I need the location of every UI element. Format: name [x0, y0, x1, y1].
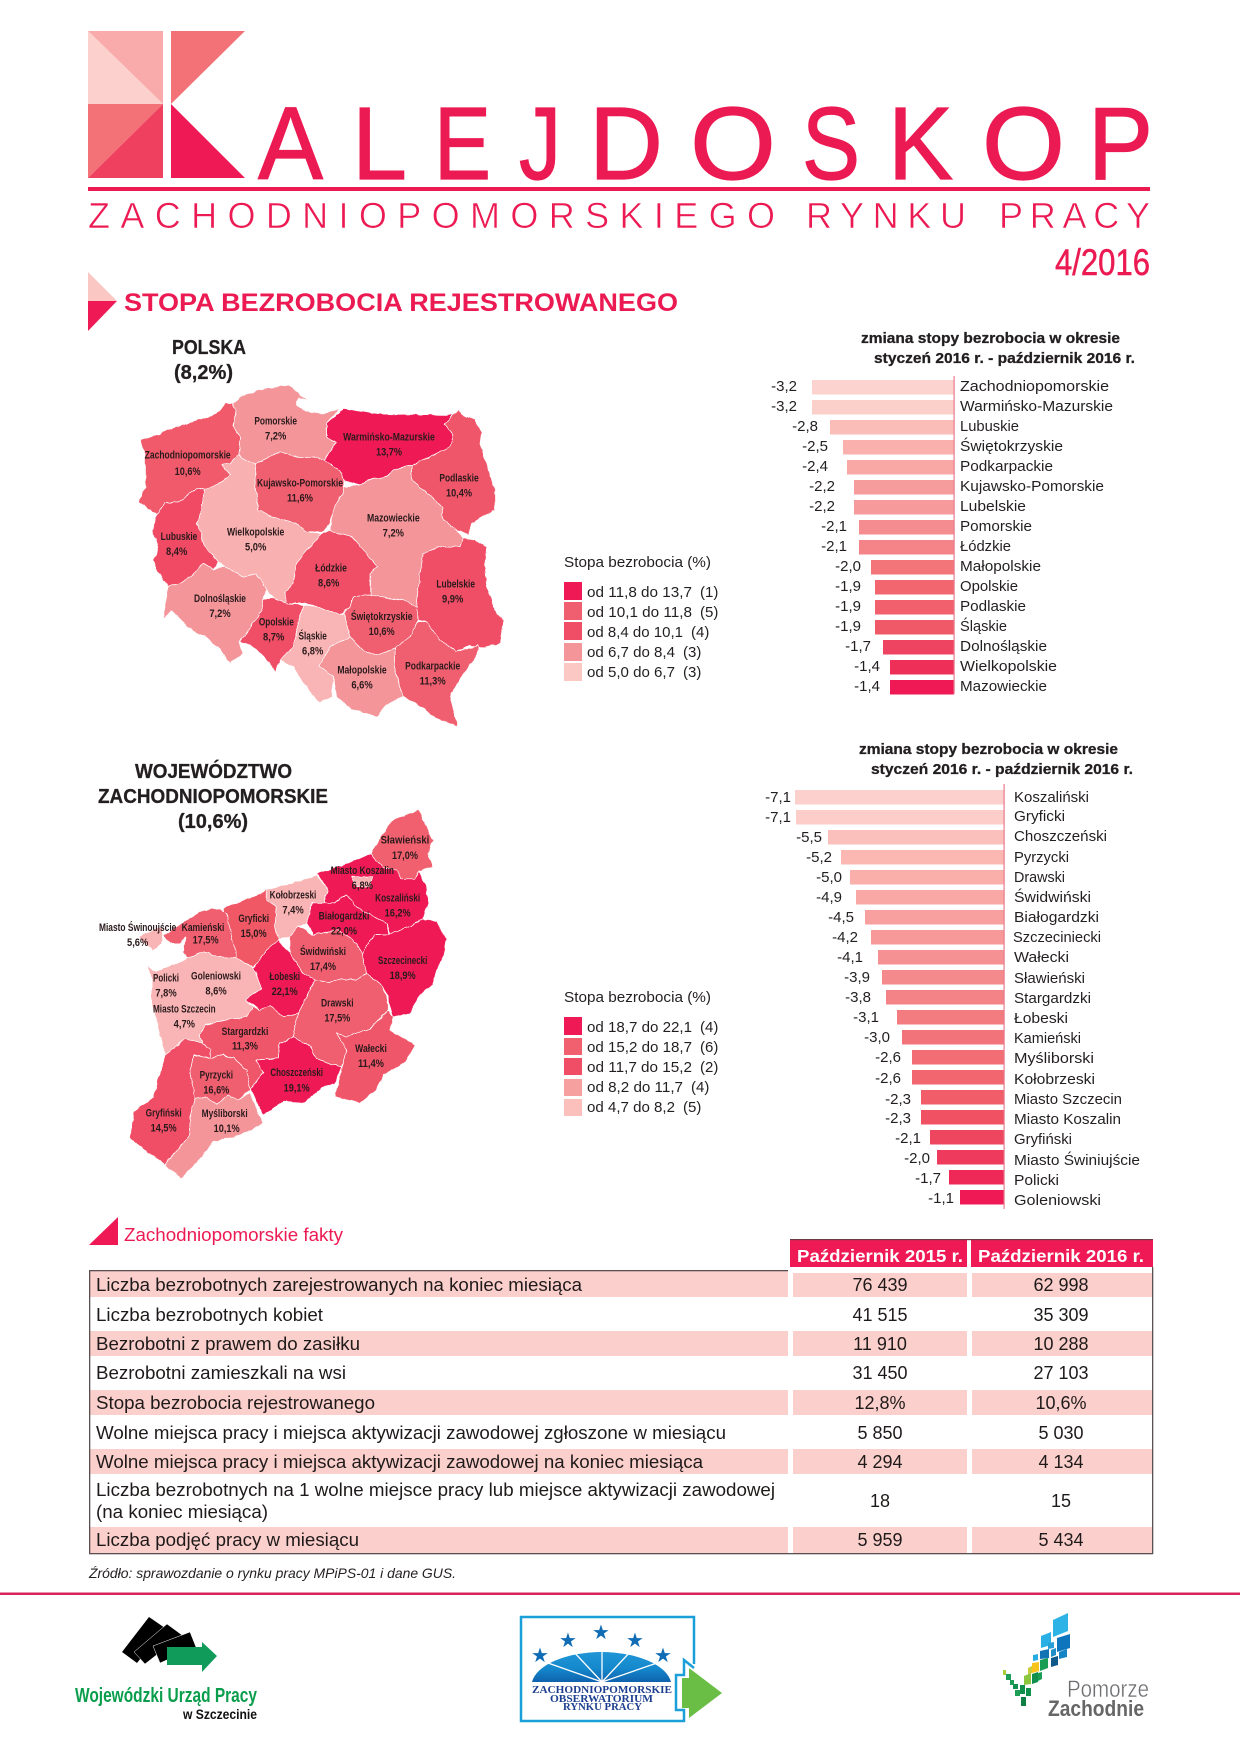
chart: change in unemployment rate by county: -4,1 — [837, 949, 863, 966]
table: West Pomeranian labour market facts: 15 — [1051, 1491, 1071, 1511]
chart: change in unemployment rate by county: Gryfiński — [1014, 1131, 1072, 1148]
map: West Pomeranian counties: Stargardzki — [222, 1026, 268, 1038]
table borders — [89, 1267, 1153, 1554]
map: Poland voivodeships: Podlaskie — [439, 473, 479, 485]
chart: change in unemployment rate by county — [765, 741, 1140, 1209]
map: West Pomeranian counties: 17,0% — [392, 850, 418, 862]
section heading: West Pomeranian facts — [89, 1217, 343, 1245]
table: West Pomeranian labour market facts: (na koniec miesiąca) — [96, 1502, 268, 1522]
map: West Pomeranian counties: 4,7% — [174, 1019, 195, 1031]
title: ALEJDOSKOP: P — [1088, 86, 1153, 201]
map: West Pomeranian counties: Pyrzycki — [200, 1070, 233, 1082]
table: West Pomeranian labour market facts: 10,6% — [1035, 1393, 1087, 1413]
chart: change in unemployment rate by voivodeship: Warmińsko-Mazurskie — [960, 398, 1113, 415]
chart: change in unemployment rate by voivodeship: Pomorskie — [960, 518, 1032, 535]
map: West Pomeranian counties: Miasto Koszalin — [331, 865, 394, 877]
map: West Pomeranian counties: Szczecinecki — [378, 955, 427, 967]
chart: change in unemployment rate by voivodeship: -2,5 — [802, 438, 828, 455]
legend: Poland unemployment rate: (3) — [683, 644, 701, 661]
chart heading: zmiana stopy bezrobocia w okresie — [859, 741, 1118, 758]
chart: change in unemployment rate by voivodeship: Śląskie — [960, 617, 1007, 635]
map: Poland voivodeships: Mazowieckie — [367, 513, 420, 525]
map: West Pomeranian counties: Świdwiński — [300, 945, 346, 958]
section heading: West Pomeranian facts: Zachodniopomorskie fakty — [124, 1225, 343, 1245]
table: West Pomeranian labour market facts: Wolne miejsca pracy i miejsca aktywizacji zawodowej zgłoszone w miesiącu — [96, 1423, 726, 1443]
map: West Pomeranian counties: Goleniowski — [191, 970, 241, 982]
chart: change in unemployment rate by county: -3,0 — [864, 1029, 890, 1046]
legend: Poland unemployment rate: (4) — [691, 624, 709, 641]
map: West Pomeranian counties: 16,6% — [203, 1085, 230, 1097]
table: West Pomeranian labour market facts: 5 850 — [857, 1423, 903, 1443]
chart: change in unemployment rate by county: -5,2 — [806, 849, 832, 866]
title: ALEJDOSKOP: J — [519, 86, 561, 201]
chart: change in unemployment rate by voivodeship: Lubuskie — [960, 418, 1019, 435]
map: Poland voivodeships: Lubuskie — [161, 531, 197, 543]
map: Poland voivodeships: 8,4% — [166, 546, 188, 558]
title: ALEJDOSKOP: E — [434, 86, 491, 201]
map: Poland voivodeships: 7,2% — [383, 528, 404, 540]
table: West Pomeranian labour market facts: 4 134 — [1038, 1452, 1084, 1472]
chart: change in unemployment rate by voivodeship: -3,2 — [771, 398, 797, 415]
table: West Pomeranian labour market facts: 12,8% — [854, 1393, 906, 1413]
chart: change in unemployment rate by county: Drawski — [1014, 869, 1065, 886]
title: ALEJDOSKOP: A — [258, 86, 323, 201]
logo: Pomorze Zachodnie: Pomorze — [1067, 1676, 1149, 1703]
table: West Pomeranian labour market facts: Wolne miejsca pracy i miejsca aktywizacji zawodowej na koniec miesiąca — [96, 1452, 704, 1472]
map: Poland voivodeships: 10,4% — [446, 488, 472, 500]
chart: change in unemployment rate by county: Łobeski — [1014, 1010, 1068, 1027]
map: Poland voivodeships: Kujawsko-Pomorskie — [257, 478, 343, 490]
table: West Pomeranian labour market facts: 10 288 — [1033, 1334, 1089, 1354]
subtitle: RYNKU — [806, 195, 966, 236]
chart heading: zmiana stopy bezrobocia w okresie — [861, 330, 1120, 347]
table: West Pomeranian labour market facts: 5 434 — [1038, 1530, 1084, 1550]
map: Poland voivodeships: 11,3% — [420, 675, 446, 687]
legend: county unemployment rate: (2) — [700, 1059, 718, 1076]
logo: Zachodniopomorskie Obserwatorium Rynku Pracy: ★ — [626, 1628, 644, 1652]
title: ALEJDOSKOP: K — [888, 86, 953, 201]
legend: Poland unemployment rate: od 5,0 do 6,7 — [587, 664, 675, 681]
legend: Poland unemployment rate: od 8,4 do 10,1 — [587, 624, 683, 641]
chart: change in unemployment rate by voivodeship: Wielkopolskie — [960, 658, 1057, 675]
chart: change in unemployment rate by voivodeship: -3,2 — [771, 378, 797, 395]
chart: change in unemployment rate by county: Gryficki — [1014, 808, 1065, 825]
map: West Pomeranian counties: Policki — [153, 973, 179, 985]
source note: Źródło: sprawozdanie o rynku pracy MPiPS-01 i dane GUS. — [88, 1565, 456, 1581]
map: Poland voivodeships: Małopolskie — [337, 664, 387, 676]
logo: Zachodniopomorskie Obserwatorium Rynku Pracy: ★ — [592, 1620, 610, 1644]
table: West Pomeranian labour market facts: 62 998 — [1033, 1275, 1089, 1295]
chart: change in unemployment rate by county: -3,8 — [845, 989, 871, 1006]
map: West Pomeranian counties: Choszczeński — [270, 1067, 323, 1079]
logo: Wojewódzki Urząd Pracy: Wojewódzki Urząd Pracy — [75, 1685, 258, 1707]
heading: Województwo zachodniopomorskie — [98, 759, 328, 833]
chart: change in unemployment rate by voivodeship: -2,2 — [809, 478, 835, 495]
chart: change in unemployment rate by voivodeship: -2,1 — [821, 518, 847, 535]
chart: change in unemployment rate by county: Stargardzki — [1014, 990, 1091, 1007]
chart: change in unemployment rate by county: Miasto Szczecin — [1014, 1091, 1122, 1108]
legend: Poland unemployment rate: (5) — [700, 604, 718, 621]
map: Poland voivodeships: 8,7% — [263, 632, 285, 644]
chart: change in unemployment rate by county: Myśliborski — [1014, 1050, 1094, 1067]
legend: county unemployment rate: od 4,7 do 8,2 — [587, 1099, 675, 1116]
shaded rows — [89, 1271, 1153, 1553]
legend: county unemployment rate: (5) — [683, 1099, 701, 1116]
map: Poland voivodeships: Opolskie — [259, 617, 294, 629]
heading: Województwo zachodniopomorskie: ZACHODNIOPOMORSKIE — [98, 786, 328, 808]
title: ALEJDOSKOP: O — [982, 86, 1065, 201]
chart: change in unemployment rate by county: Kołobrzeski — [1014, 1071, 1095, 1088]
legend: Poland unemployment rate: (3) — [683, 664, 701, 681]
logo: Zachodniopomorskie Obserwatorium Rynku Pracy: RYNKU PRACY — [563, 1701, 642, 1713]
chart: change in unemployment rate by voivodeship: Lubelskie — [960, 498, 1026, 515]
logo: Pomorze Zachodnie — [1003, 1613, 1149, 1721]
legend: county unemployment rate: od 15,2 do 18,7 — [587, 1039, 692, 1056]
chart: change in unemployment rate by voivodeship: -1,7 — [845, 638, 871, 655]
legend: county unemployment rate: Stopa bezrobocia (%) — [564, 989, 711, 1006]
chart: change in unemployment rate by county: Szczeciniecki — [1013, 929, 1101, 946]
title: ALEJDOSKOP: L — [352, 86, 407, 201]
chart: change in unemployment rate by county: -1,7 — [915, 1170, 941, 1187]
chart: change in unemployment rate by county: -4,5 — [828, 909, 854, 926]
table: West Pomeranian labour market facts: 18 — [870, 1491, 890, 1511]
map: West Pomeranian counties: 19,1% — [284, 1082, 310, 1094]
table: West Pomeranian labour market facts — [89, 1239, 1153, 1554]
chart: change in unemployment rate by county: Wałecki — [1014, 949, 1069, 966]
map: Poland voivodeships: Łódzkie — [315, 563, 347, 575]
chart: change in unemployment rate by voivodeship: Dolnośląskie — [960, 638, 1047, 655]
legend: Poland unemployment rate: od 6,7 do 8,4 — [587, 644, 675, 661]
map: Poland voivodeships: 6,8% — [302, 646, 324, 658]
chart: change in unemployment rate by voivodeship: Świętokrzyskie — [960, 437, 1063, 455]
table: West Pomeranian labour market facts: Liczba bezrobotnych kobiet — [96, 1305, 323, 1325]
chart: change in unemployment rate by voivodeship: Kujawsko-Pomorskie — [960, 478, 1104, 495]
heading: Polska: POLSKA — [172, 337, 246, 359]
map: West Pomeranian counties: Gryfiński — [146, 1108, 182, 1120]
map: West Pomeranian counties: 17,5% — [193, 934, 219, 946]
chart: change in unemployment rate by voivodeship: Łódzkie — [960, 538, 1011, 555]
legend: county unemployment rate: (6) — [700, 1039, 718, 1056]
logo: Zachodniopomorskie Obserwatorium Rynku Pracy: ★ — [559, 1628, 577, 1652]
chart: change in unemployment rate by county: -4,2 — [832, 929, 858, 946]
title: ALEJDOSKOP: S — [802, 86, 860, 201]
map: West Pomeranian counties: Kamieński — [182, 922, 224, 934]
chart: change in unemployment rate by voivodeship: -2,0 — [835, 558, 861, 575]
table: West Pomeranian labour market facts: 5 030 — [1038, 1423, 1084, 1443]
table: West Pomeranian labour market facts: Bezrobotni zamieszkali na wsi — [96, 1363, 346, 1383]
title: ALEJDOSKOP: D — [589, 86, 663, 201]
map: Poland voivodeships: 9,9% — [442, 593, 464, 605]
chart: change in unemployment rate by county: -2,0 — [904, 1150, 930, 1167]
logo: kaleidoscope letter K — [88, 31, 245, 178]
logo: Zachodniopomorskie Obserwatorium Rynku Pracy — [521, 1617, 722, 1721]
chart: change in unemployment rate by county: Świdwiński — [1014, 888, 1091, 906]
map: West Pomeranian counties: 7,8% — [155, 988, 177, 1000]
logo: Zachodniopomorskie Obserwatorium Rynku Pracy: OBSERWATORIUM — [550, 1693, 654, 1705]
logo: Wojewódzki Urząd Pracy: w Szczecinie — [182, 1706, 257, 1722]
map: West Pomeranian counties: 14,5% — [151, 1123, 177, 1135]
logo: Pomorze Zachodnie: Zachodnie — [1048, 1696, 1144, 1721]
logo: Zachodniopomorskie Obserwatorium Rynku Pracy: ★ — [654, 1643, 672, 1667]
map: Poland voivodeships: 7,2% — [265, 430, 287, 442]
legend: Poland unemployment rate: Stopa bezrobocia (%) — [564, 554, 711, 571]
chart: change in unemployment rate by county: Miasto Koszalin — [1014, 1111, 1121, 1128]
chart: change in unemployment rate by voivodeship: Małopolskie — [960, 558, 1041, 575]
chart: change in unemployment rate by voivodeship: -1,9 — [835, 598, 861, 615]
map: West Pomeranian counties — [99, 810, 447, 1178]
map: West Pomeranian counties: Myśliborski — [202, 1108, 248, 1120]
map: Poland voivodeships: Lubelskie — [436, 578, 475, 590]
chart: change in unemployment rate by county: -3,9 — [844, 969, 870, 986]
table: West Pomeranian labour market facts: 11 910 — [853, 1334, 907, 1354]
table: West Pomeranian labour market facts: 4 294 — [857, 1452, 903, 1472]
map: West Pomeranian counties: 5,6% — [127, 937, 149, 949]
chart: change in unemployment rate by county: Koszaliński — [1014, 789, 1089, 806]
map: West Pomeranian counties: 11,4% — [358, 1058, 384, 1070]
chart: change in unemployment rate by county: -1,1 — [928, 1190, 954, 1207]
chart: change in unemployment rate by county: Goleniowski — [1014, 1192, 1101, 1209]
section heading: registered unemployment rate — [88, 272, 678, 331]
map: West Pomeranian counties: 18,9% — [390, 970, 416, 982]
heading: Polska — [172, 337, 246, 384]
chart: change in unemployment rate by voivodeship: -1,9 — [835, 618, 861, 635]
table header: Październik 2016 r. — [978, 1246, 1144, 1266]
chart: change in unemployment rate by voivodeship: Podkarpackie — [960, 458, 1053, 475]
map: West Pomeranian counties: Koszaliński — [375, 893, 420, 905]
table: West Pomeranian labour market facts: Liczba bezrobotnych zarejestrowanych na koniec miesiąca — [96, 1275, 583, 1295]
map: Poland voivodeships: 10,6% — [369, 626, 395, 638]
map: West Pomeranian counties: 11,3% — [232, 1040, 258, 1052]
legend: county unemployment rate: od 11,7 do 15,2 — [587, 1059, 692, 1076]
chart heading: styczeń 2016 r. - październik 2016 r. — [871, 761, 1133, 778]
chart: change in unemployment rate by voivodeship — [771, 330, 1135, 695]
chart: change in unemployment rate by county: -4,9 — [816, 889, 842, 906]
chart: change in unemployment rate by county: Pyrzycki — [1014, 849, 1069, 866]
map: West Pomeranian counties: Kołobrzeski — [270, 890, 316, 902]
chart: change in unemployment rate by voivodeship: -2,8 — [792, 418, 818, 435]
chart heading — [859, 741, 1133, 778]
logo: Zachodniopomorskie Obserwatorium Rynku Pracy: ZACHODNIOPOMORSKIE — [532, 1684, 672, 1696]
map: West Pomeranian counties: 16,2% — [385, 908, 411, 920]
chart: change in unemployment rate by county: -2,1 — [895, 1130, 921, 1147]
map: Poland voivodeships: 10,6% — [175, 466, 201, 478]
section heading: registered unemployment rate: STOPA BEZROBOCIA REJESTROWANEGO — [124, 289, 678, 317]
chart: change in unemployment rate by county: -3,1 — [853, 1009, 879, 1026]
logo: Wojewódzki Urząd Pracy — [75, 1617, 258, 1722]
map: West Pomeranian counties: 6,8% — [352, 880, 373, 892]
table: West Pomeranian labour market facts: Stopa bezrobocia rejestrowanego — [96, 1393, 375, 1413]
chart: change in unemployment rate by county: Choszczeński — [1014, 828, 1107, 845]
logo: Zachodniopomorskie Obserwatorium Rynku Pracy: ★ — [531, 1643, 549, 1667]
map: West Pomeranian counties: Łobeski — [269, 971, 300, 983]
chart: change in unemployment rate by county: -7,1 — [765, 809, 791, 826]
chart: change in unemployment rate by voivodeship: -2,1 — [821, 538, 847, 555]
table: West Pomeranian labour market facts: Liczba bezrobotnych na 1 wolne miejsce pracy lub miejsce aktywizacji zawodowej — [96, 1480, 775, 1500]
map: West Pomeranian counties: 17,5% — [324, 1013, 351, 1025]
title: ALEJDOSKOP: O — [690, 86, 776, 201]
chart: change in unemployment rate by voivodeship: -1,4 — [854, 658, 880, 675]
map: West Pomeranian counties: Miasto Szczecin — [153, 1004, 216, 1016]
map: West Pomeranian counties: 22,1% — [272, 986, 298, 998]
chart: change in unemployment rate by county: -7,1 — [765, 789, 791, 806]
chart: change in unemployment rate by county: -2,6 — [875, 1070, 901, 1087]
map: Poland voivodeships: Śląskie — [298, 630, 327, 643]
subtitle: ZACHODNIOPOMORSKIEGO — [88, 195, 775, 236]
chart heading — [861, 330, 1135, 367]
map: Poland voivodeships — [138, 385, 503, 727]
heading: Województwo zachodniopomorskie: WOJEWÓDZTWO — [135, 759, 292, 783]
map: West Pomeranian counties: 7,4% — [282, 905, 304, 917]
chart: change in unemployment rate by county: -5,0 — [816, 869, 842, 886]
map: Poland voivodeships: Podkarpackie — [405, 660, 460, 672]
chart: change in unemployment rate by voivodeship: Opolskie — [960, 578, 1018, 595]
map: Poland voivodeships: 6,6% — [351, 679, 373, 691]
heading: Województwo zachodniopomorskie: (10,6%) — [178, 811, 248, 833]
map: Poland voivodeships: Warmińsko-Mazurskie — [343, 432, 435, 444]
chart: change in unemployment rate by voivodeship: -1,9 — [835, 578, 861, 595]
map: West Pomeranian counties: Sławieński — [381, 834, 429, 846]
map: Poland voivodeships: 7,2% — [209, 608, 231, 620]
map: West Pomeranian counties: Wałecki — [355, 1043, 387, 1055]
legend: Poland unemployment rate: od 10,1 do 11,8 — [587, 604, 692, 621]
table: West Pomeranian labour market facts: 76 439 — [852, 1275, 908, 1295]
chart: change in unemployment rate by county: -2,3 — [885, 1110, 911, 1127]
map: Poland voivodeships: 8,6% — [318, 578, 340, 590]
legend: county unemployment rate: od 8,2 do 11,7 — [587, 1079, 683, 1096]
legend: county unemployment rate — [564, 989, 718, 1116]
chart: change in unemployment rate by county: Miasto Świniujście — [1014, 1151, 1140, 1169]
subtitle — [88, 195, 1150, 236]
chart: change in unemployment rate by county: Białogardzki — [1014, 909, 1099, 926]
legend: Poland unemployment rate: od 11,8 do 13,7 — [587, 584, 692, 601]
issue number: 4/2016 — [1055, 242, 1150, 283]
table: West Pomeranian labour market facts: 41 515 — [852, 1305, 908, 1325]
map: West Pomeranian counties: Miasto Świnoujście — [99, 921, 176, 934]
chart: change in unemployment rate by voivodeship: Zachodniopomorskie — [960, 378, 1109, 395]
map: Poland voivodeships: Wielkopolskie — [227, 526, 284, 538]
map: West Pomeranian counties: Drawski — [321, 998, 354, 1010]
chart: change in unemployment rate by voivodeship: -2,4 — [802, 458, 828, 475]
table: West Pomeranian labour market facts: Bezrobotni z prawem do zasiłku — [96, 1334, 360, 1354]
chart: change in unemployment rate by county: -2,3 — [885, 1091, 911, 1108]
chart: change in unemployment rate by county: -2,6 — [875, 1049, 901, 1066]
map: Poland voivodeships: 11,6% — [287, 493, 313, 505]
title: ALEJDOSKOP — [258, 86, 1153, 201]
chart: change in unemployment rate by voivodeship: -1,4 — [854, 678, 880, 695]
map: Poland voivodeships: 5,0% — [245, 541, 267, 553]
map: West Pomeranian counties: Białogardzki — [319, 910, 369, 922]
chart: change in unemployment rate by voivodeship: Podlaskie — [960, 598, 1026, 615]
subtitle: PRACY — [999, 195, 1150, 236]
legend: county unemployment rate: (4) — [691, 1079, 709, 1096]
chart: change in unemployment rate by voivodeship: Mazowieckie — [960, 678, 1047, 695]
map: West Pomeranian counties: 8,6% — [205, 985, 227, 997]
table header — [790, 1239, 1153, 1267]
table: West Pomeranian labour market facts: 31 450 — [852, 1363, 908, 1383]
table: West Pomeranian labour market facts: 35 309 — [1033, 1305, 1089, 1325]
legend: county unemployment rate: (4) — [700, 1019, 718, 1036]
chart heading: styczeń 2016 r. - październik 2016 r. — [874, 350, 1135, 367]
chart: change in unemployment rate by county: Policki — [1014, 1172, 1059, 1189]
table header: Październik 2015 r. — [797, 1246, 963, 1266]
map: West Pomeranian counties: Gryficki — [238, 913, 269, 925]
map: Poland voivodeships: Zachodniopomorskie — [145, 449, 231, 461]
map: Poland voivodeships: 13,7% — [376, 447, 402, 459]
map: Poland voivodeships: Dolnośląskie — [194, 593, 246, 605]
chart: change in unemployment rate by voivodeship: -2,2 — [809, 498, 835, 515]
map: Poland voivodeships: Świętokrzyskie — [351, 610, 412, 623]
table: West Pomeranian labour market facts: Liczba podjęć pracy w miesiącu — [96, 1530, 359, 1550]
heading: Polska: (8,2%) — [174, 362, 233, 384]
chart: change in unemployment rate by county: Sławieński — [1014, 970, 1085, 987]
table: West Pomeranian labour market facts: 27 103 — [1033, 1363, 1089, 1383]
masthead — [88, 31, 1153, 283]
legend: county unemployment rate: od 18,7 do 22,1 — [587, 1019, 692, 1036]
chart: change in unemployment rate by county: -5,5 — [796, 829, 822, 846]
map: West Pomeranian counties: 15,0% — [241, 928, 267, 940]
legend: Poland unemployment rate — [564, 554, 718, 681]
map: Poland voivodeships: Pomorskie — [254, 415, 297, 427]
map: West Pomeranian counties: 22,0% — [331, 925, 357, 937]
legend: Poland unemployment rate: (1) — [700, 584, 718, 601]
chart: change in unemployment rate by county: Kamieński — [1014, 1030, 1081, 1047]
table: West Pomeranian labour market facts: 5 959 — [857, 1530, 903, 1550]
map: West Pomeranian counties: 17,4% — [310, 961, 336, 973]
map: West Pomeranian counties: 10,1% — [214, 1123, 240, 1135]
